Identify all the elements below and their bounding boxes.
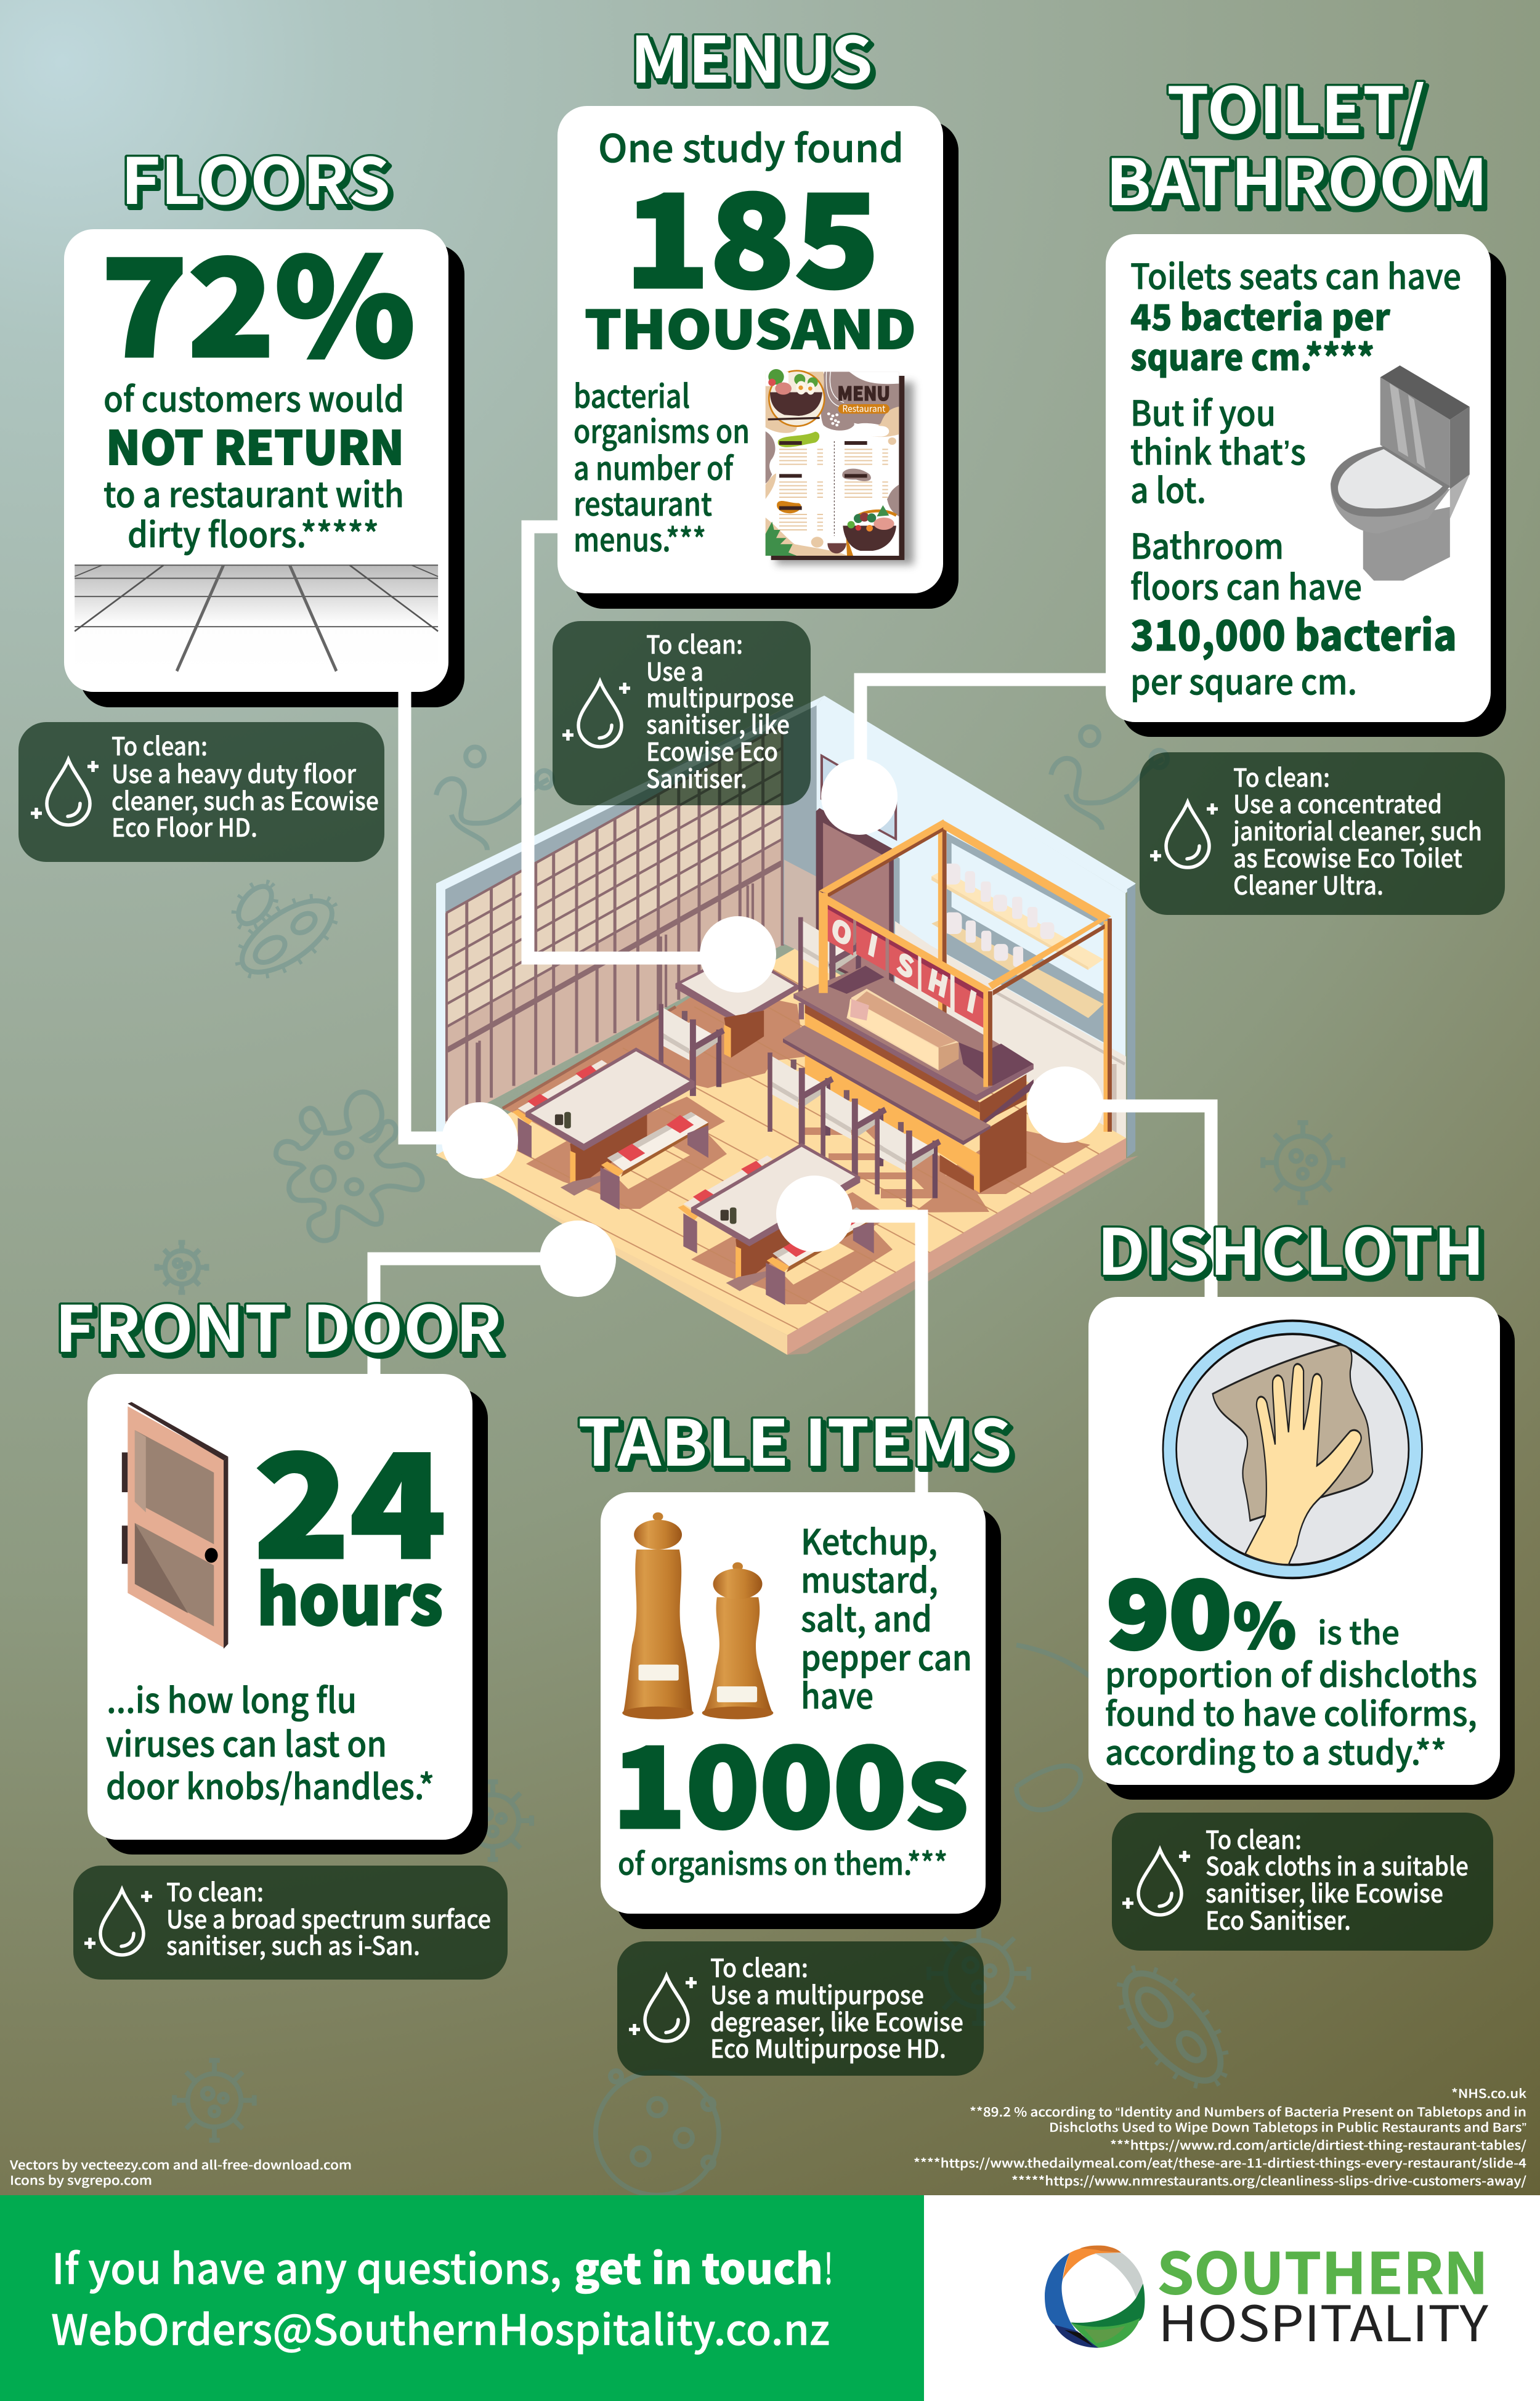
clean panel: floors: Eco Floor HD. <box>111 807 257 844</box>
panel: toilet: Bathroom <box>1130 519 1284 569</box>
panel: table items: 1000s <box>612 1699 968 1859</box>
panel: table items: have <box>801 1669 873 1719</box>
footer: contact band: ! <box>824 2235 833 2296</box>
clean panel: floors <box>18 722 384 862</box>
restaurant isometric illustration <box>436 696 1138 1355</box>
panel: front door <box>87 1374 488 1855</box>
image credits: Vectors by vecteezy.com and all-free-download.com <box>9 2155 352 2173</box>
clean panel: table items <box>617 1941 984 2076</box>
panel: dishcloth <box>1088 1297 1515 1800</box>
image credits <box>9 2155 352 2188</box>
clean panel: front door <box>73 1866 508 1980</box>
panel: table items <box>601 1492 1001 1929</box>
clean panel: menus <box>553 621 811 805</box>
panel: menus: menus.*** <box>573 514 706 561</box>
icon: restaurant menu <box>766 369 914 565</box>
panel: toilet <box>1106 234 1506 737</box>
panel: toilet: a lot. <box>1130 463 1206 513</box>
panel: floors: to a restaurant with <box>103 468 404 518</box>
counter <box>783 965 1034 1193</box>
heading: table items: TABLE ITEMS <box>581 1396 1015 1488</box>
counter, shelves, frame and OISHI banner <box>770 819 1111 1207</box>
panel: dishcloth: is the <box>1318 1607 1400 1654</box>
footer: contact band: If you have any questions, <box>52 2235 562 2296</box>
panel: toilet: per square cm. <box>1130 655 1357 705</box>
panel: floors <box>64 200 464 709</box>
panel: menus: THOUSAND <box>585 288 916 364</box>
heading: toilet / bathroom: BATHROOM <box>1106 132 1488 224</box>
OISHI banner: I <box>964 978 980 1022</box>
footer: contact band <box>0 2195 924 2401</box>
clean panel: dishcloth: To clean: <box>1206 1819 1302 1856</box>
panel: dishcloth: 90 <box>1107 1542 1231 1675</box>
panel: floors: of customers would <box>103 372 404 422</box>
clean panel: front door: Use a broad spectrum surface <box>166 1899 491 1936</box>
chairs behind counter and far table <box>661 917 863 1096</box>
heading: menus: MENUS <box>630 9 873 101</box>
wooden floor and platform <box>436 949 1138 1355</box>
panel: floors: NOT RETURN <box>106 411 404 478</box>
panel: dishcloth: according to a study.** <box>1105 1726 1446 1774</box>
panel: menus: bacterial <box>573 371 690 417</box>
heading: front door: FRONT DOOR <box>58 1282 505 1374</box>
panel: toilet: square cm.**** <box>1130 329 1374 381</box>
panel: front door: 24 <box>254 1392 446 1599</box>
floor planks <box>447 965 1099 1329</box>
panel: dishcloth: found to have coliforms, <box>1105 1687 1477 1736</box>
connector dots <box>442 758 1103 1297</box>
panel: menus: One study found <box>598 118 904 173</box>
icon: sanitiser drop <box>1122 1850 1190 1915</box>
clean panel: menus: Ecowise Eco <box>646 731 778 768</box>
sources <box>914 2084 1527 2189</box>
panel: toilet: think that’s <box>1130 425 1306 475</box>
clean panel: toilet: Cleaner Ultra. <box>1233 865 1384 902</box>
clean panel: dishcloth: Soak cloths in a suitable <box>1206 1846 1469 1883</box>
footer: contact band: WebOrders@SouthernHospitality.co.nz <box>51 2296 830 2357</box>
OISHI banner: I <box>865 922 881 965</box>
heading: front door: FRONT DOOR <box>55 1278 502 1370</box>
panel: front door: viruses can last on <box>106 1717 387 1767</box>
clean panel: toilet: as Ecowise Eco Toilet <box>1233 838 1462 875</box>
heading: table items: TABLE ITEMS <box>578 1392 1012 1484</box>
icon: logo ring <box>1045 2246 1145 2348</box>
icon: restaurant menu: Restaurant <box>842 402 886 415</box>
right wall details: door, window bands, shelves, frame, counter <box>784 808 1135 1158</box>
sources: ***https://www.rd.com/article/dirtiest-thing-restaurant-tables/ <box>1110 2135 1526 2153</box>
panel: table items: pepper can <box>801 1631 972 1681</box>
back posts and beams <box>819 819 1111 1132</box>
sushi display case <box>846 989 958 1070</box>
panel: front door: hours <box>257 1545 443 1645</box>
shelves with jars <box>931 864 1104 1018</box>
bar chairs <box>770 1052 940 1207</box>
footer: logo: HOSPITALITY <box>1158 2285 1489 2356</box>
footer: contact band: get in touch <box>574 2235 823 2296</box>
panel: menus: restaurant <box>573 479 712 525</box>
sources: *****https://www.nmrestaurants.org/cleanliness-slips-drive-customers-away/ <box>1011 2171 1526 2189</box>
floor shadows <box>503 986 1090 1304</box>
clean panel: table items: Use a multipurpose <box>710 1975 924 2012</box>
clean panel: toilet: To clean: <box>1233 757 1330 794</box>
heading: toilet / bathroom: TOILET/ <box>1170 63 1429 155</box>
blob virus <box>276 1092 423 1241</box>
icon: sanitiser drop <box>1150 802 1218 867</box>
clean panel: floors: Use a heavy duty floor <box>111 754 356 790</box>
icon: toilet <box>1331 365 1470 580</box>
clean panel: floors: To clean: <box>111 726 208 763</box>
clean panel: menus: multipurpose <box>646 678 794 715</box>
dining tables and benches <box>513 1047 874 1306</box>
sources: *NHS.co.uk <box>1451 2084 1527 2102</box>
heading: toilet / bathroom: BATHROOM <box>1109 136 1491 227</box>
footer: logo: SOUTHERN <box>1157 2228 1488 2310</box>
panel: menus: 185 <box>625 139 880 324</box>
panel: front door: door knobs/handles.* <box>106 1760 434 1810</box>
icon: restaurant menu: MENU <box>837 378 890 406</box>
panel: menus: a number of <box>573 443 734 489</box>
panel: menus <box>557 106 958 609</box>
icon: salt and pepper mills <box>622 1513 773 1719</box>
left wall with shoji screens <box>436 696 1136 1159</box>
image credits: Icons by svgrepo.com <box>10 2171 152 2188</box>
front frame beam and posts <box>819 891 1111 1087</box>
clean panel: dishcloth: Eco Sanitiser. <box>1206 1900 1351 1937</box>
heading: dishcloth: DISHCLOTH <box>1097 1201 1485 1293</box>
heading: floors: FLOORS <box>124 134 394 226</box>
icon: hand wiping with cloth <box>1163 1321 1422 1578</box>
clean panel: menus: To clean: <box>646 624 743 661</box>
heading: menus: MENUS <box>633 13 876 105</box>
panel: table items: Ketchup, <box>801 1515 938 1565</box>
OISHI banner <box>824 900 983 1028</box>
heading: toilet / bathroom <box>1106 60 1491 227</box>
clean panel: menus: Sanitiser. <box>646 758 747 795</box>
clean panel: front door: sanitiser, such as i-San. <box>166 1925 420 1962</box>
icon: sanitiser drop <box>629 1976 697 2041</box>
panel: floors: 72% <box>101 200 415 395</box>
panel: table items: of organisms on them.*** <box>618 1840 947 1884</box>
OISHI banner: H <box>925 957 951 1006</box>
clean panel: toilet <box>1140 752 1505 915</box>
clean panel: dishcloth <box>1112 1813 1493 1951</box>
clean panel: toilet: janitorial cleaner, such <box>1232 811 1482 848</box>
panel: dishcloth: proportion of dishcloths <box>1105 1648 1477 1697</box>
panel: floors: dirty floors.***** <box>128 508 379 558</box>
panel: toilet: Toilets seats can have <box>1130 250 1461 299</box>
OISHI banner: O <box>829 906 855 955</box>
icon: door <box>122 1402 228 1649</box>
far table and chairs <box>675 951 800 1058</box>
clean panel: table items: degreaser, like Ecowise <box>710 2002 963 2039</box>
heading: dishcloth: DISHCLOTH <box>1100 1205 1488 1297</box>
icon: sanitiser drop <box>31 760 99 825</box>
sources: **89.2 % according to “Identity and Numbers of Bacteria Present on Tabletops and in <box>970 2102 1526 2120</box>
icon: sanitiser drop <box>562 681 630 747</box>
panel: table items: mustard, <box>801 1553 938 1603</box>
icon: floor tiles <box>75 565 438 671</box>
panel: dishcloth: % <box>1233 1578 1296 1666</box>
footer: logo <box>924 2195 1540 2401</box>
panel: front door: ...is how long flu <box>107 1673 357 1723</box>
OISHI banner: S <box>894 940 917 987</box>
background pattern: faint bacteria and viruses <box>156 727 1343 2195</box>
panel: toilet: floors can have <box>1130 560 1362 610</box>
clean panel: floors: cleaner, such as Ecowise <box>111 781 379 818</box>
clean panel: menus: sanitiser, like <box>646 704 790 741</box>
bacteria pair <box>224 874 351 993</box>
icon: sanitiser drop <box>84 1890 152 1955</box>
connector lines <box>374 527 1211 1492</box>
heading: floors: FLOORS <box>121 131 391 222</box>
sources: Dishcloths Used to Wipe Down Tabletops in Public Restaurants and Bars ” <box>1049 2118 1526 2135</box>
panel: toilet: 45 bacteria per <box>1130 289 1390 341</box>
clean panel: front door: To clean: <box>166 1872 264 1909</box>
clean panel: table items: To clean: <box>710 1948 808 1985</box>
clean panel: dishcloth: sanitiser, like Ecowise <box>1206 1873 1443 1910</box>
panel: menus: organisms on <box>573 406 750 452</box>
panel: toilet: But if you <box>1130 386 1276 436</box>
panel: toilet: 310,000 bacteria <box>1130 602 1457 663</box>
clean panel: toilet: Use a concentrated <box>1233 784 1442 821</box>
sources: ****https://www.thedailymeal.com/eat/these-are-11-dirtiest-things-every-restaurant/slide-4 <box>914 2153 1526 2171</box>
panel: table items: salt, and <box>801 1592 932 1642</box>
clean panel: table items: Eco Multipurpose HD. <box>710 2028 946 2065</box>
heading: toilet / bathroom: TOILET/ <box>1167 60 1425 152</box>
clean panel: menus: Use a <box>646 651 703 688</box>
